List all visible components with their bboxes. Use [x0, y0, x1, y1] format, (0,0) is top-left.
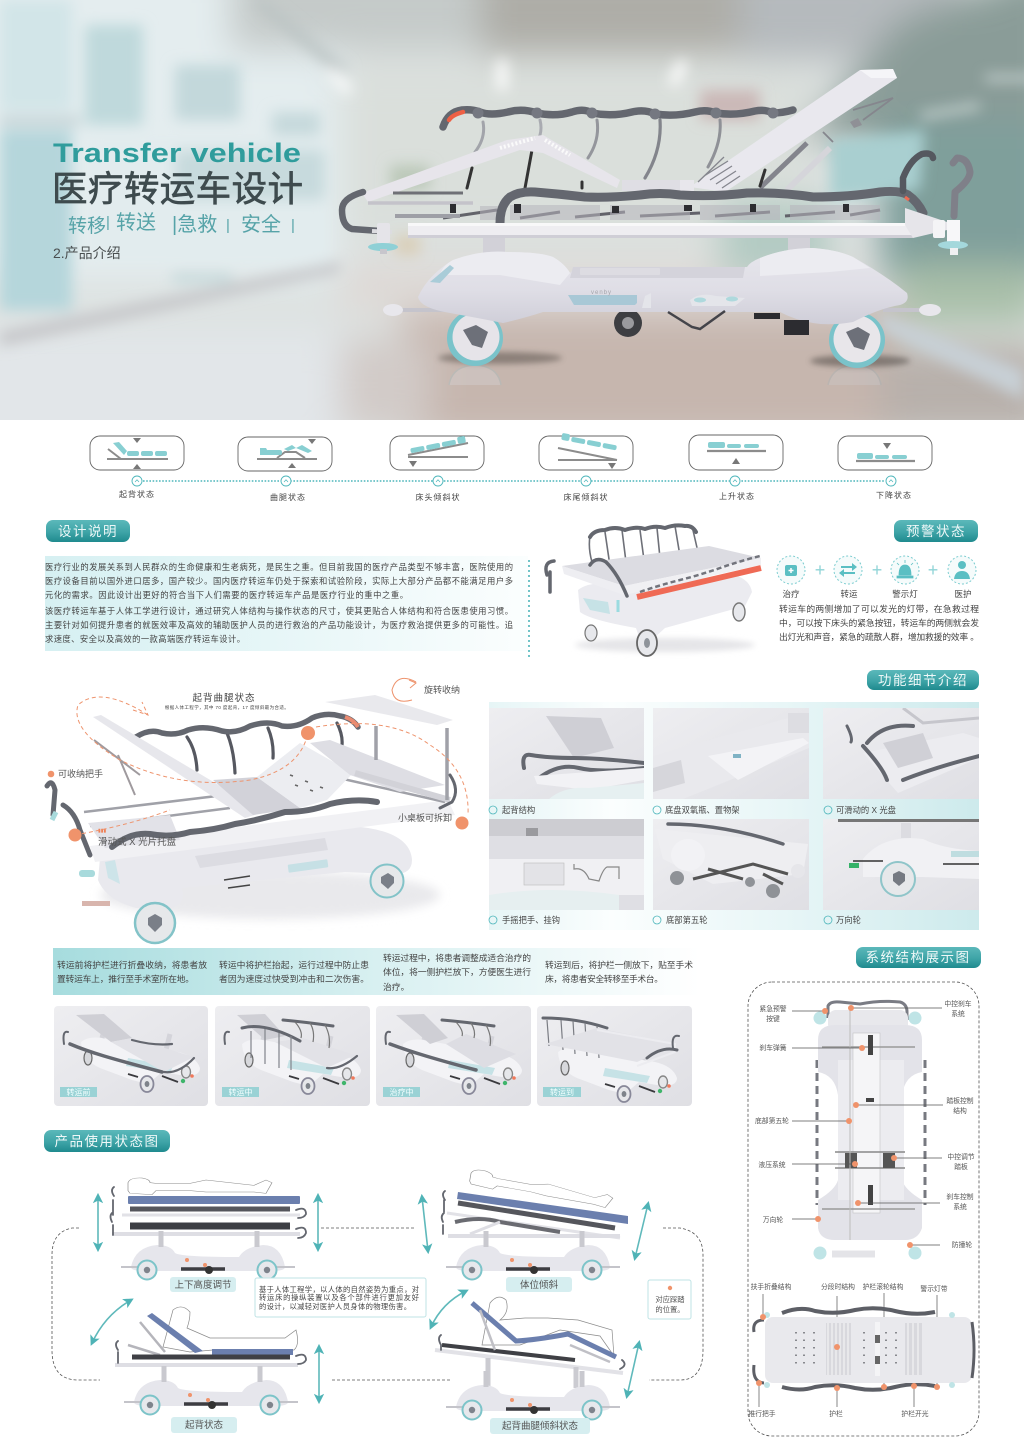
diagram: top view labels: 系统	[953, 1202, 967, 1211]
back rest	[690, 69, 897, 192]
thumb: back structure	[489, 708, 644, 799]
usage: back raised: 起背状态	[185, 1419, 223, 1431]
thumb: base storage	[653, 708, 809, 799]
panel: transfer steps text: 置转运车上，推行至手术室所在地。	[57, 973, 194, 984]
icon labels: 医护	[954, 589, 972, 599]
panel: transfer steps text: 体位，将一侧护栏放下，方便医生进行	[383, 966, 531, 977]
panel: transfer steps text: 转运到后，将护栏一侧放下，贴至手术	[545, 959, 693, 970]
panel: design description: 求速度、安全以及高效的一款高端医疗转运车设计。	[45, 634, 245, 644]
hero: keywords: 安全	[241, 213, 281, 236]
panel: function details grid	[489, 702, 979, 930]
panel: design description: 医疗设备目前以国外进口居多，国产较少。国内医疗转运车仍处于探索和试验阶段，实际上大部分产品都不能满足用户多	[45, 576, 513, 586]
diagram: top view labels: 中控调节	[947, 1152, 975, 1161]
lower rail	[500, 191, 923, 223]
heading: system structure	[856, 947, 981, 968]
timeline	[132, 476, 896, 486]
hero: section number: 2.产品介绍	[53, 245, 121, 261]
usage: height adjust	[98, 1178, 318, 1292]
usage: dashed connectors	[52, 1228, 703, 1380]
panel: warning icons: +	[928, 560, 938, 580]
struts and frame behind back rest	[760, 98, 893, 190]
panel: transfer steps text: 转运前将护栏进行折叠收纳，将患者放	[57, 959, 207, 970]
icon: transfer	[834, 556, 862, 584]
diagram: bed labels: 分段时结构	[821, 1282, 855, 1291]
annotation: orange markers	[48, 726, 468, 842]
photo: during transfer: 转运中	[228, 1087, 252, 1097]
diagram: bed deck top view	[754, 1308, 974, 1390]
hero: keywords: 转移	[68, 215, 106, 237]
usage: body tilt	[422, 1169, 648, 1292]
hero banner	[0, 0, 1024, 460]
diagram: top view labels: 刹车弹簧	[759, 1043, 787, 1052]
annotation: subtitle: 根据人体工程学，其中 70 度起背，17 度倾斜最为合适。	[165, 704, 289, 711]
hero: keywords	[68, 211, 295, 237]
annotation: table: 小桌板可拆卸	[398, 812, 452, 823]
diagram: top view labels: 底部第五轮	[755, 1116, 789, 1125]
mechanism under rail	[393, 192, 463, 194]
diagram: top view labels: 中控刹车	[944, 999, 972, 1008]
annotation: handle: 可收纳把手	[58, 768, 103, 779]
note: marker legend: 对应踩踏	[655, 1295, 685, 1304]
base body	[418, 248, 908, 324]
columns	[483, 238, 505, 260]
photo: during transfer	[215, 1006, 370, 1106]
note: ergonomics: 基于人体工程学，以人体的自然姿势为重点，对	[259, 1285, 419, 1294]
hero: keywords: |	[226, 217, 230, 234]
captions: 起背结构	[502, 805, 535, 815]
diagram: bed labels: 扶手折叠结构	[751, 1282, 792, 1291]
state icon strip	[90, 433, 932, 502]
hero: keywords: |	[106, 214, 110, 231]
diagram: bed labels: 护栏	[829, 1409, 843, 1418]
annotation: tray: 滑动式 X 光片托盘	[98, 836, 177, 848]
icon labels: 治疗	[782, 589, 800, 599]
state: back raised	[90, 436, 184, 470]
diagram: top view labels: 紧急预警	[759, 1004, 787, 1013]
diagram: top view labels: 刹车控制	[946, 1192, 974, 1201]
captions: 万向轮	[836, 915, 861, 925]
heading: function details: 功能细节介绍	[878, 673, 968, 688]
heading: design notes	[46, 520, 130, 542]
diagram: top view labels: 踏板控制	[946, 1096, 974, 1105]
note: ergonomics: 转运床的操纵装置以及各个部件进行更加友好	[259, 1293, 419, 1302]
note: marker legend	[648, 1280, 691, 1319]
foot bars	[393, 308, 940, 312]
diagram: underside top view	[814, 1001, 925, 1260]
diagram: top view labels: 万向轮	[763, 1215, 783, 1224]
state labels	[119, 489, 912, 502]
hero: keywords: |急救	[172, 213, 217, 236]
upper rail	[443, 110, 793, 127]
heading: warning state	[894, 520, 978, 542]
diagram: bed labels: 护栏开光	[901, 1409, 929, 1418]
text: warning description	[779, 603, 979, 642]
panel: warning icons: +	[815, 560, 825, 580]
state labels: 下降状态	[876, 490, 912, 500]
note: ergonomics	[255, 1278, 426, 1317]
leg panels	[362, 135, 620, 202]
text: warning description: 转运车的两侧增加了可以发光的灯带，在急救过程	[779, 603, 979, 614]
illustration: large cart with annotations: ▮▮▮	[98, 828, 107, 834]
state labels: 床头倾斜状	[416, 492, 460, 502]
wheel reflections	[449, 365, 881, 385]
panel: transfer steps text: 转运中将护栏抬起，运行过程中防止患	[219, 959, 369, 970]
annotation: rotate: 旋转收纳	[424, 684, 460, 695]
text: warning description: 出灯光和声音，紧急的疏散人群，增加救援的效率 。	[779, 631, 979, 642]
right handles	[903, 154, 933, 191]
thumb: handle hook	[489, 819, 644, 910]
diagram: top view labels: 按键	[766, 1014, 780, 1023]
panel: design description: 该医疗转运车基于人体工学进行设计，通过研究人体结构与操作状态的尺寸，使其更贴合人体结构和符合医患使用习惯。	[45, 606, 513, 616]
heading: product usage	[44, 1130, 170, 1152]
photo: during treatment	[376, 1006, 531, 1106]
diagram: top view markers	[815, 1005, 913, 1248]
heading: warning state: 预警状态	[906, 524, 966, 539]
panel: transfer steps text	[53, 948, 700, 995]
diagram: bed labels: 警示灯带	[920, 1284, 948, 1293]
hero: title English: Transfer vehicle	[53, 138, 301, 168]
diagram: top view labels	[755, 999, 975, 1249]
photo: before transfer: 转运前	[66, 1087, 90, 1097]
diagram: bed labels	[748, 1282, 948, 1418]
panel: warning icons	[777, 556, 976, 599]
captions: 手摇把手、挂钩	[502, 915, 560, 925]
text: warning description: 中，可以按下床头的紧急按钮，转运车的两侧就会发	[779, 617, 979, 628]
hero: keywords: 转送	[116, 211, 156, 234]
panel: design description	[45, 556, 528, 651]
note: marker legend: 的位置。	[655, 1305, 685, 1314]
icon labels: 转运	[840, 589, 858, 599]
icon labels	[782, 589, 972, 599]
diagram: bed labels: 推行把手	[748, 1409, 776, 1418]
photo: arrived	[537, 1006, 692, 1106]
state labels: 上升状态	[719, 491, 755, 501]
hangers	[187, 723, 342, 773]
thumb: x-ray tray	[823, 708, 979, 799]
heading: product usage: 产品使用状态图	[54, 1133, 160, 1149]
note: ergonomics: 的设计，以减轻对医护人员身体的物理伤害。	[259, 1302, 411, 1311]
diagram: top view labels: 结构	[953, 1106, 967, 1115]
illustration: warning lights cart	[546, 525, 761, 656]
usage: body tilt: 体位倾斜	[520, 1279, 558, 1291]
state: head tilt	[390, 436, 484, 470]
icon: treatment	[777, 556, 805, 584]
state: raised	[689, 435, 783, 470]
thumb: fifth wheel	[653, 819, 809, 910]
captions: 可滑动的 X 光盘	[836, 805, 896, 815]
panel: transfer steps text: 治疗。	[383, 981, 409, 992]
diagram: bed labels: 护栏滚轮结构	[863, 1282, 904, 1291]
casters	[447, 310, 503, 366]
panel: system structure	[748, 982, 979, 1436]
hero: transfer vehicle illustration	[342, 69, 970, 385]
diagram: top view labels: 防撞轮	[952, 1240, 972, 1249]
photo: during treatment: 治疗中	[390, 1087, 414, 1097]
hangers	[467, 120, 765, 188]
panel: design description: 元化的需求。因此设计出更好的符合当下人们需要的医疗转运车产品是医疗行业的重中之重。	[45, 590, 408, 600]
usage: height adjust: 上下高度调节	[174, 1279, 232, 1291]
thumb: caster	[823, 819, 979, 910]
panel: design description: 医疗行业的发展关系到人民群众的生命健康和生老病死，是民生之重。但目前我国的医疗产品类型不够丰富，医院使用的	[45, 562, 513, 572]
panel: transfer steps text: 者因为速度过快受到冲击和二次伤害。	[219, 973, 369, 984]
illustration: large cart with annotations	[47, 695, 456, 943]
captions	[489, 805, 896, 925]
diagram: top view labels: 踏板	[954, 1162, 968, 1171]
panel: design description: 主要针对如何提升患者的就医效率及高效的辅助医护人员的进行救治的产品功能设计，为医疗救治提供更多的可能性。追	[45, 620, 514, 630]
hero: keywords: |	[291, 217, 295, 234]
deck	[408, 223, 913, 238]
usage: back and knee raised tilt: 起背曲腿倾斜状态	[502, 1420, 578, 1432]
usage: back and knee raised tilt	[431, 1291, 639, 1434]
captions: 底部第五轮	[666, 915, 708, 925]
heading: function details	[867, 670, 979, 690]
photo: arrived: 转运到	[550, 1087, 574, 1097]
icon labels: 警示灯	[892, 589, 918, 599]
state: lowered	[838, 436, 932, 470]
icon: medic	[948, 556, 976, 584]
diagram: top view labels: 系统	[951, 1009, 965, 1018]
state labels: 床尾倾斜状	[564, 492, 608, 502]
annotations: orange dashed motion paths	[75, 678, 468, 835]
icon: warning lamp	[891, 556, 919, 584]
state: knee raised	[238, 437, 332, 471]
hero: title Chinese: 医疗转运车设计	[52, 169, 303, 209]
left handle	[342, 192, 380, 231]
pedals and mechanism	[668, 311, 725, 329]
panel: transfer steps text: 床，将患者安全转移至手术台。	[545, 973, 663, 984]
captions: 底盘双氧瓶、置物架	[665, 805, 740, 815]
usage: back raised	[92, 1300, 319, 1433]
hero: transfer vehicle illustration: venby	[591, 290, 612, 296]
heading: system structure: 系统结构展示图	[866, 950, 970, 965]
state labels: 曲腿状态	[270, 492, 306, 502]
photo: before transfer	[54, 1006, 208, 1106]
state: foot tilt	[539, 433, 633, 470]
diagram: bed markers	[756, 1314, 940, 1391]
state labels: 起背状态	[119, 489, 155, 499]
heading: design notes: 设计说明	[58, 524, 118, 539]
diagram: top view labels: 液压系统	[758, 1160, 786, 1169]
annotation: title: 起背曲腿状态	[192, 692, 256, 704]
panel: warning icons: +	[872, 560, 882, 580]
panel: transfer steps text: 转运过程中，将患者调整成适合治疗的	[383, 952, 531, 963]
diagram: leader lines	[759, 1008, 943, 1407]
